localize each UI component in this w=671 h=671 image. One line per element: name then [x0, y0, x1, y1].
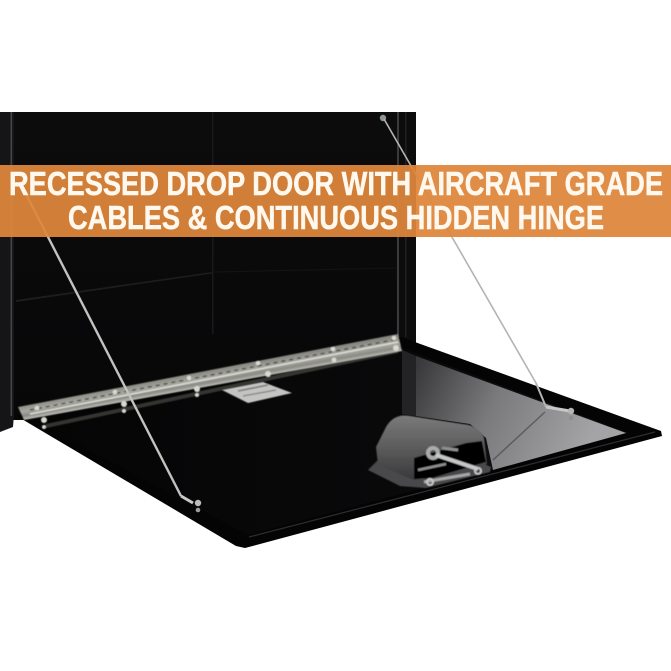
toolbox body [0, 112, 416, 432]
hinge label plate [222, 382, 292, 403]
continuous hinge [18, 334, 402, 429]
left support cable [27, 196, 201, 512]
door reflection [416, 356, 626, 470]
latch handle [418, 448, 481, 485]
right support cable [380, 115, 574, 460]
open drop door [15, 337, 662, 548]
banner headline [9, 165, 663, 236]
T-handle latch housing [368, 415, 491, 488]
orange banner [0, 165, 671, 237]
